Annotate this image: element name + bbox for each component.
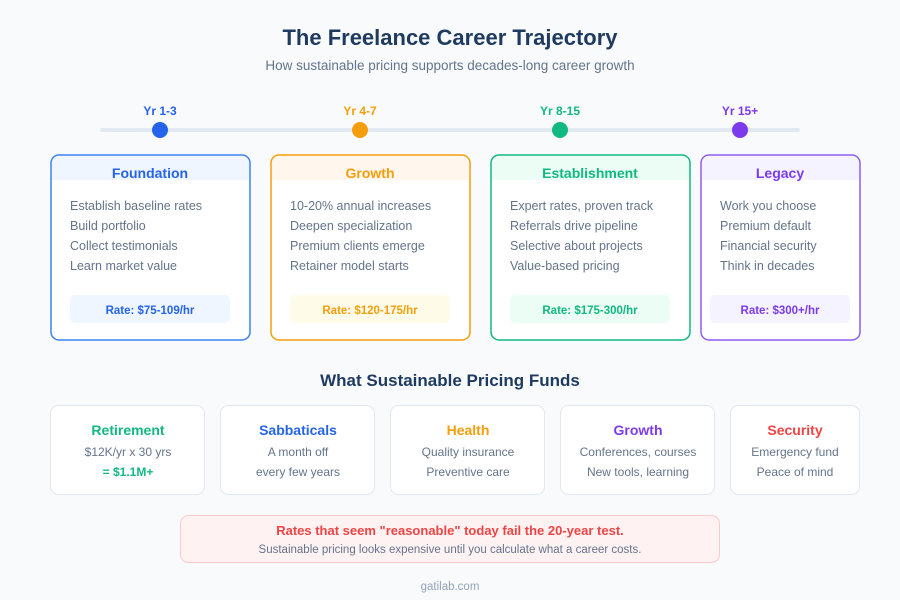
card: health: Preventive care (426, 465, 510, 479)
card: security: Security (767, 422, 823, 438)
panel: foundation: Collect testimonials (70, 239, 178, 253)
panel: legacy: Legacy (756, 165, 804, 181)
card: sabbaticals (220, 406, 374, 494)
panel: establishment: Selective about projects (510, 239, 643, 253)
card: health (390, 406, 544, 494)
panel: foundation: Establish baseline rates (70, 199, 202, 213)
title: The Freelance Career Trajectory (282, 25, 618, 50)
panel: foundation: Foundation (112, 165, 188, 181)
card: sabbaticals: A month off (268, 445, 329, 459)
panel: foundation (51, 155, 250, 340)
card: health: Health (447, 422, 489, 438)
callout (180, 516, 720, 562)
timeline: Yr 1-3 (143, 104, 177, 118)
card: security: Emergency fund (751, 445, 839, 459)
panel: establishment: Referrals drive pipeline (510, 219, 638, 233)
panel: growth: Growth (346, 165, 394, 181)
card: security (730, 406, 860, 494)
panel: growth: Premium clients emerge (290, 239, 425, 253)
card: retirement: $12K/yr x 30 yrs (85, 445, 171, 459)
panel: establishment: Rate: $175-300/hr (542, 305, 638, 317)
subtitle: How sustainable pricing supports decades-long career growth (265, 58, 635, 73)
footer: gatilab.com (421, 581, 479, 593)
panel: legacy (701, 155, 860, 340)
heading: what sustainable pricing funds: What Sustainable Pricing Funds (320, 371, 580, 390)
panel: establishment: Value-based pricing (510, 259, 620, 273)
card: growth (560, 406, 714, 494)
panel: foundation: Learn market value (70, 259, 177, 273)
panel: foundation: Rate: $75-109/hr (106, 305, 195, 317)
card: growth: New tools, learning (587, 465, 689, 479)
timeline: Yr 4-7 (343, 104, 377, 118)
panel: establishment (491, 155, 690, 340)
panel: legacy: Think in decades (720, 259, 815, 273)
timeline (100, 104, 800, 138)
card: security: Peace of mind (757, 465, 833, 479)
panel: establishment: Expert rates, proven track (510, 199, 654, 213)
callout: Sustainable pricing looks expensive until you calculate what a career costs. (259, 544, 641, 556)
card: health: Quality insurance (422, 445, 515, 459)
callout: Rates that seem "reasonable" today fail the 20-year test. (276, 523, 624, 538)
panel: legacy: Work you choose (720, 199, 816, 213)
card: sabbaticals: Sabbaticals (259, 422, 337, 438)
timeline: Yr 8-15 (540, 104, 580, 118)
card: growth: Conferences, courses (580, 445, 696, 459)
panel: growth: Rate: $120-175/hr (322, 305, 418, 317)
panel: growth: Deepen specialization (290, 219, 412, 233)
panel: establishment: Establishment (542, 165, 638, 181)
panel: foundation: Build portfolio (70, 219, 146, 233)
panel: legacy: Rate: $300+/hr (741, 305, 820, 317)
panel: growth (271, 155, 470, 340)
card: growth: Growth (614, 422, 662, 438)
card: retirement (50, 406, 204, 494)
timeline: Yr 15+ (722, 104, 758, 118)
panel: growth: Retainer model starts (290, 259, 409, 273)
card: retirement: = $1.1M+ (103, 465, 153, 479)
panel: legacy: Premium default (720, 219, 812, 233)
panel: legacy: Financial security (720, 239, 817, 253)
panel: growth: 10-20% annual increases (290, 199, 431, 213)
card: retirement: Retirement (91, 422, 165, 438)
card: sabbaticals: every few years (256, 465, 340, 479)
